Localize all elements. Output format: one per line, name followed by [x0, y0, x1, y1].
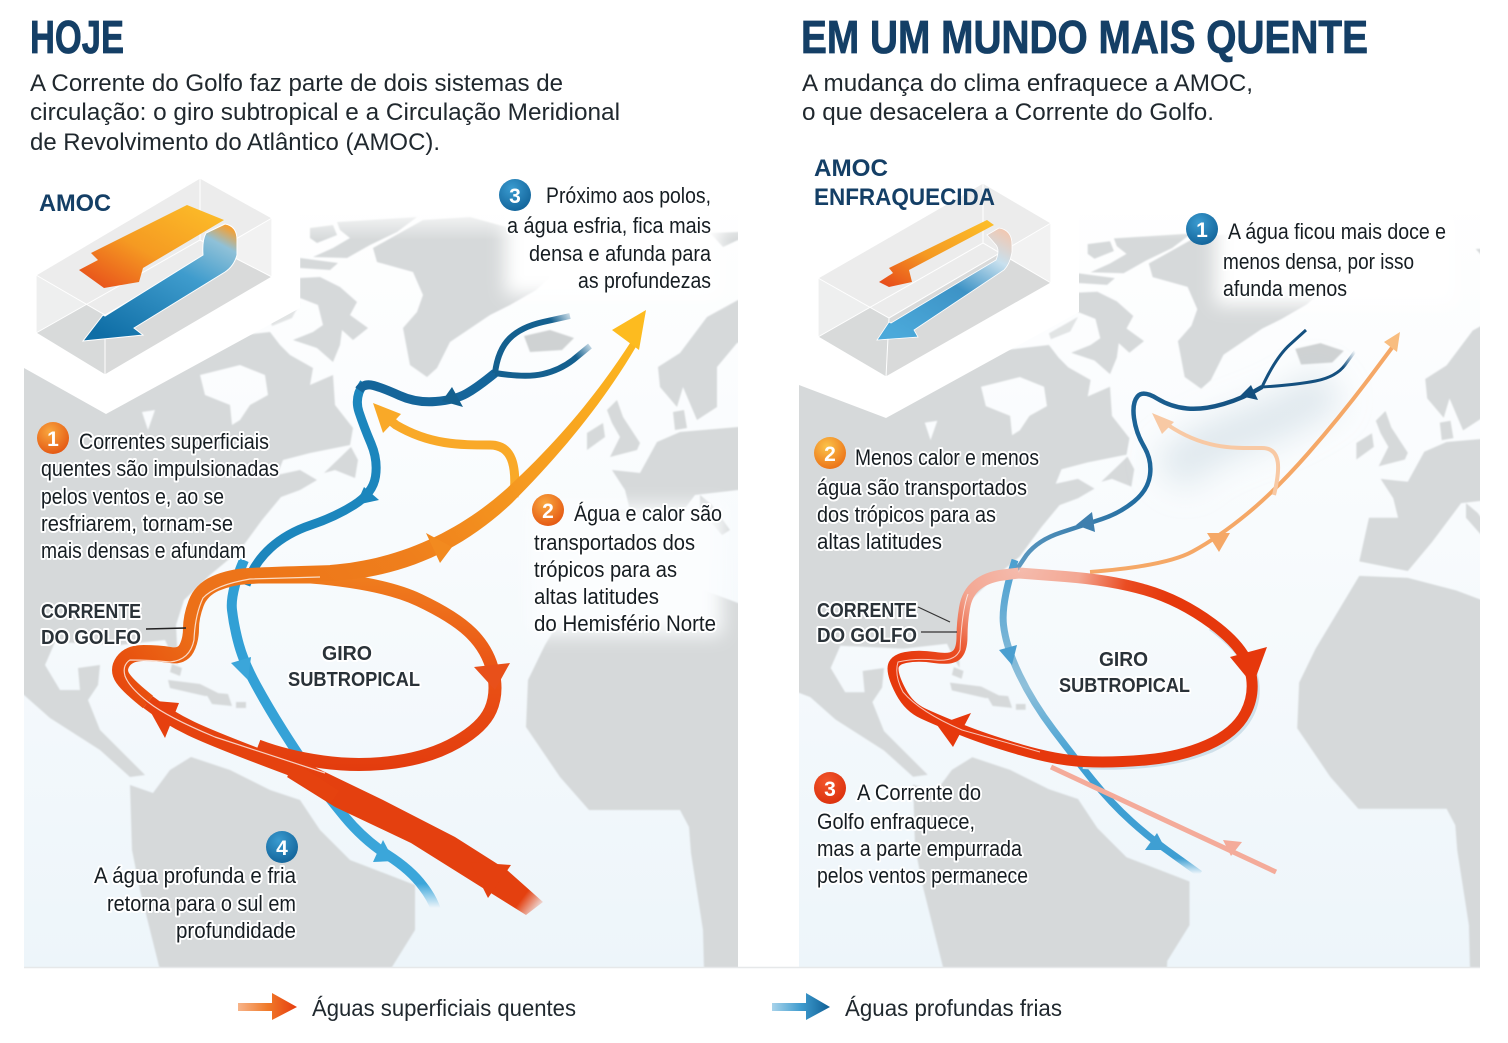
icon: AMOC box — [36, 178, 272, 375]
title: em um mundo mais quente: EM UM MUNDO MAIS QUENTE — [801, 11, 1368, 63]
badge 3 — [814, 772, 846, 804]
badge 2 — [814, 437, 846, 469]
callout: step 2 right — [814, 437, 1039, 554]
label: giro subtropical left: GIRO — [322, 643, 372, 665]
badge 4 — [266, 831, 298, 863]
callout: step 1 right — [1186, 213, 1446, 301]
arrow: branch to labrador left — [373, 403, 515, 497]
badge 1 — [37, 422, 69, 454]
arrow: gulf stream main current left — [120, 310, 646, 773]
badge 1 — [1186, 213, 1218, 245]
callout: step 1 left — [37, 422, 279, 563]
callout: step 3 right: mas a parte empurrada — [817, 836, 1023, 861]
label: corrente do golfo right: CORRENTE — [817, 600, 917, 622]
callout: step 2 left: Água e calor são — [574, 501, 722, 526]
label: corrente do golfo right — [817, 600, 957, 647]
callout: step 4 left — [94, 831, 298, 943]
panel: hoje map — [24, 179, 738, 967]
callout: step 3 right — [814, 772, 1028, 888]
callout: step 3 left: Próximo aos polos, — [546, 183, 711, 208]
label: corrente do golfo left — [41, 601, 186, 649]
badge 2: 2 — [542, 500, 554, 523]
callout: step 1 left: resfriarem, tornam-se — [41, 511, 233, 536]
map: land masses right — [799, 234, 1480, 967]
label: corrente do golfo right: DO GOLFO — [817, 625, 917, 647]
intro text: hoje: circulação: o giro subtropical e a Circulação Meridional — [30, 99, 620, 126]
label: giro subtropical right — [1059, 649, 1190, 697]
panel: warmer world map — [799, 159, 1480, 967]
callout: step 2 right: Menos calor e menos — [855, 445, 1039, 470]
badge 3: 3 — [509, 185, 521, 208]
label: corrente do golfo left: CORRENTE — [41, 601, 141, 623]
label: AMOC enfraquecida: AMOC — [814, 155, 888, 182]
badge 1: 1 — [47, 428, 59, 451]
badge 2 — [532, 494, 564, 526]
callout: step 2 right: altas latitudes — [817, 529, 942, 554]
label: AMOC enfraquecida: ENFRAQUECIDA — [814, 184, 995, 211]
callout: step 2 right: dos trópicos para as — [817, 502, 996, 527]
arrow: deep cold return left — [231, 560, 436, 910]
label: giro subtropical right: GIRO — [1099, 649, 1148, 671]
label: giro subtropical right: SUBTROPICAL — [1059, 675, 1190, 697]
label: corrente do golfo left: DO GOLFO — [41, 627, 141, 649]
callout: step 2 left — [532, 494, 722, 636]
callout: step 3 right: Golfo enfraquece, — [817, 809, 975, 834]
callout: step 1 left: Correntes superficiais — [79, 429, 269, 454]
arrow: wind-driven faint arm right — [1051, 767, 1276, 872]
callout: step 1 right: A água ficou mais doce e — [1228, 219, 1446, 244]
legend: warm surface waters: Águas superficiais quentes — [312, 995, 576, 1021]
badge 3: 3 — [824, 778, 836, 801]
legend: cold deep waters: Águas profundas frias — [845, 995, 1062, 1021]
callout: step 4 left: A água profunda e fria — [94, 863, 297, 888]
intro text: mundo mais quente — [802, 70, 1253, 126]
label: giro subtropical left: SUBTROPICAL — [288, 669, 420, 691]
arrow: deep cold return right — [999, 560, 1200, 874]
arrow: upper cold current left — [246, 316, 590, 585]
badge 1: 1 — [1196, 219, 1208, 242]
callout: step 3 right: pelos ventos permanece — [817, 863, 1028, 888]
callout: step 2 left: trópicos para as — [534, 557, 677, 582]
icon: weakened AMOC box — [818, 183, 1051, 377]
intro text: mundo mais quente: A mudança do clima enfraquece a AMOC, — [802, 70, 1253, 97]
arrow: weak northward current right — [1090, 332, 1400, 572]
callout: step 2 right: água são transportados — [817, 475, 1027, 500]
callout: step 1 left: mais densas e afundam — [41, 538, 246, 563]
callout: step 2 left: altas latitudes — [534, 584, 659, 609]
callout: step 3 left: as profundezas — [578, 268, 711, 293]
intro text: mundo mais quente: o que desacelera a Corrente do Golfo. — [802, 99, 1214, 126]
callout: step 1 left: pelos ventos e, ao se — [41, 484, 224, 509]
legend: cold deep waters — [772, 993, 1062, 1021]
map: land masses left — [24, 217, 738, 967]
callout: step 3 right: A Corrente do — [857, 780, 981, 805]
callout: step 4 left: retorna para o sul em — [107, 891, 296, 916]
title: hoje: HOJE — [30, 11, 124, 63]
label: giro subtropical left — [288, 643, 420, 691]
badge 2: 2 — [824, 443, 836, 466]
badge 4: 4 — [276, 837, 288, 860]
callout: step 3 left: densa e afunda para — [529, 241, 712, 266]
arrow: subtropical gyre left — [230, 577, 510, 764]
callout: step 1 left: quentes são impulsionadas — [41, 456, 279, 481]
callout: step 3 left — [499, 179, 712, 293]
label: AMOC enfraquecida — [814, 155, 995, 211]
label: AMOC: AMOC — [39, 190, 111, 217]
intro text: hoje — [30, 70, 620, 156]
callout: step 4 left: profundidade — [176, 918, 296, 943]
callout: step 2 left: do Hemisfério Norte — [534, 611, 716, 636]
intro text: hoje: de Revolvimento do Atlântico (AMOC). — [30, 129, 440, 156]
callout: step 1 right: afunda menos — [1223, 276, 1347, 301]
callout: step 1 right: menos densa, por isso — [1223, 249, 1414, 274]
arrow: upper cold current right — [1015, 330, 1356, 572]
callout: step 2 left: transportados dos — [534, 530, 695, 555]
callout: step 3 left: a água esfria, fica mais — [507, 213, 711, 238]
badge 3 — [499, 179, 531, 211]
intro text: hoje: A Corrente do Golfo faz parte de dois sistemas de — [30, 70, 563, 97]
arrow: gyre and gulf stream right — [893, 573, 1267, 765]
arrow: wind-driven red arm left — [148, 702, 543, 915]
